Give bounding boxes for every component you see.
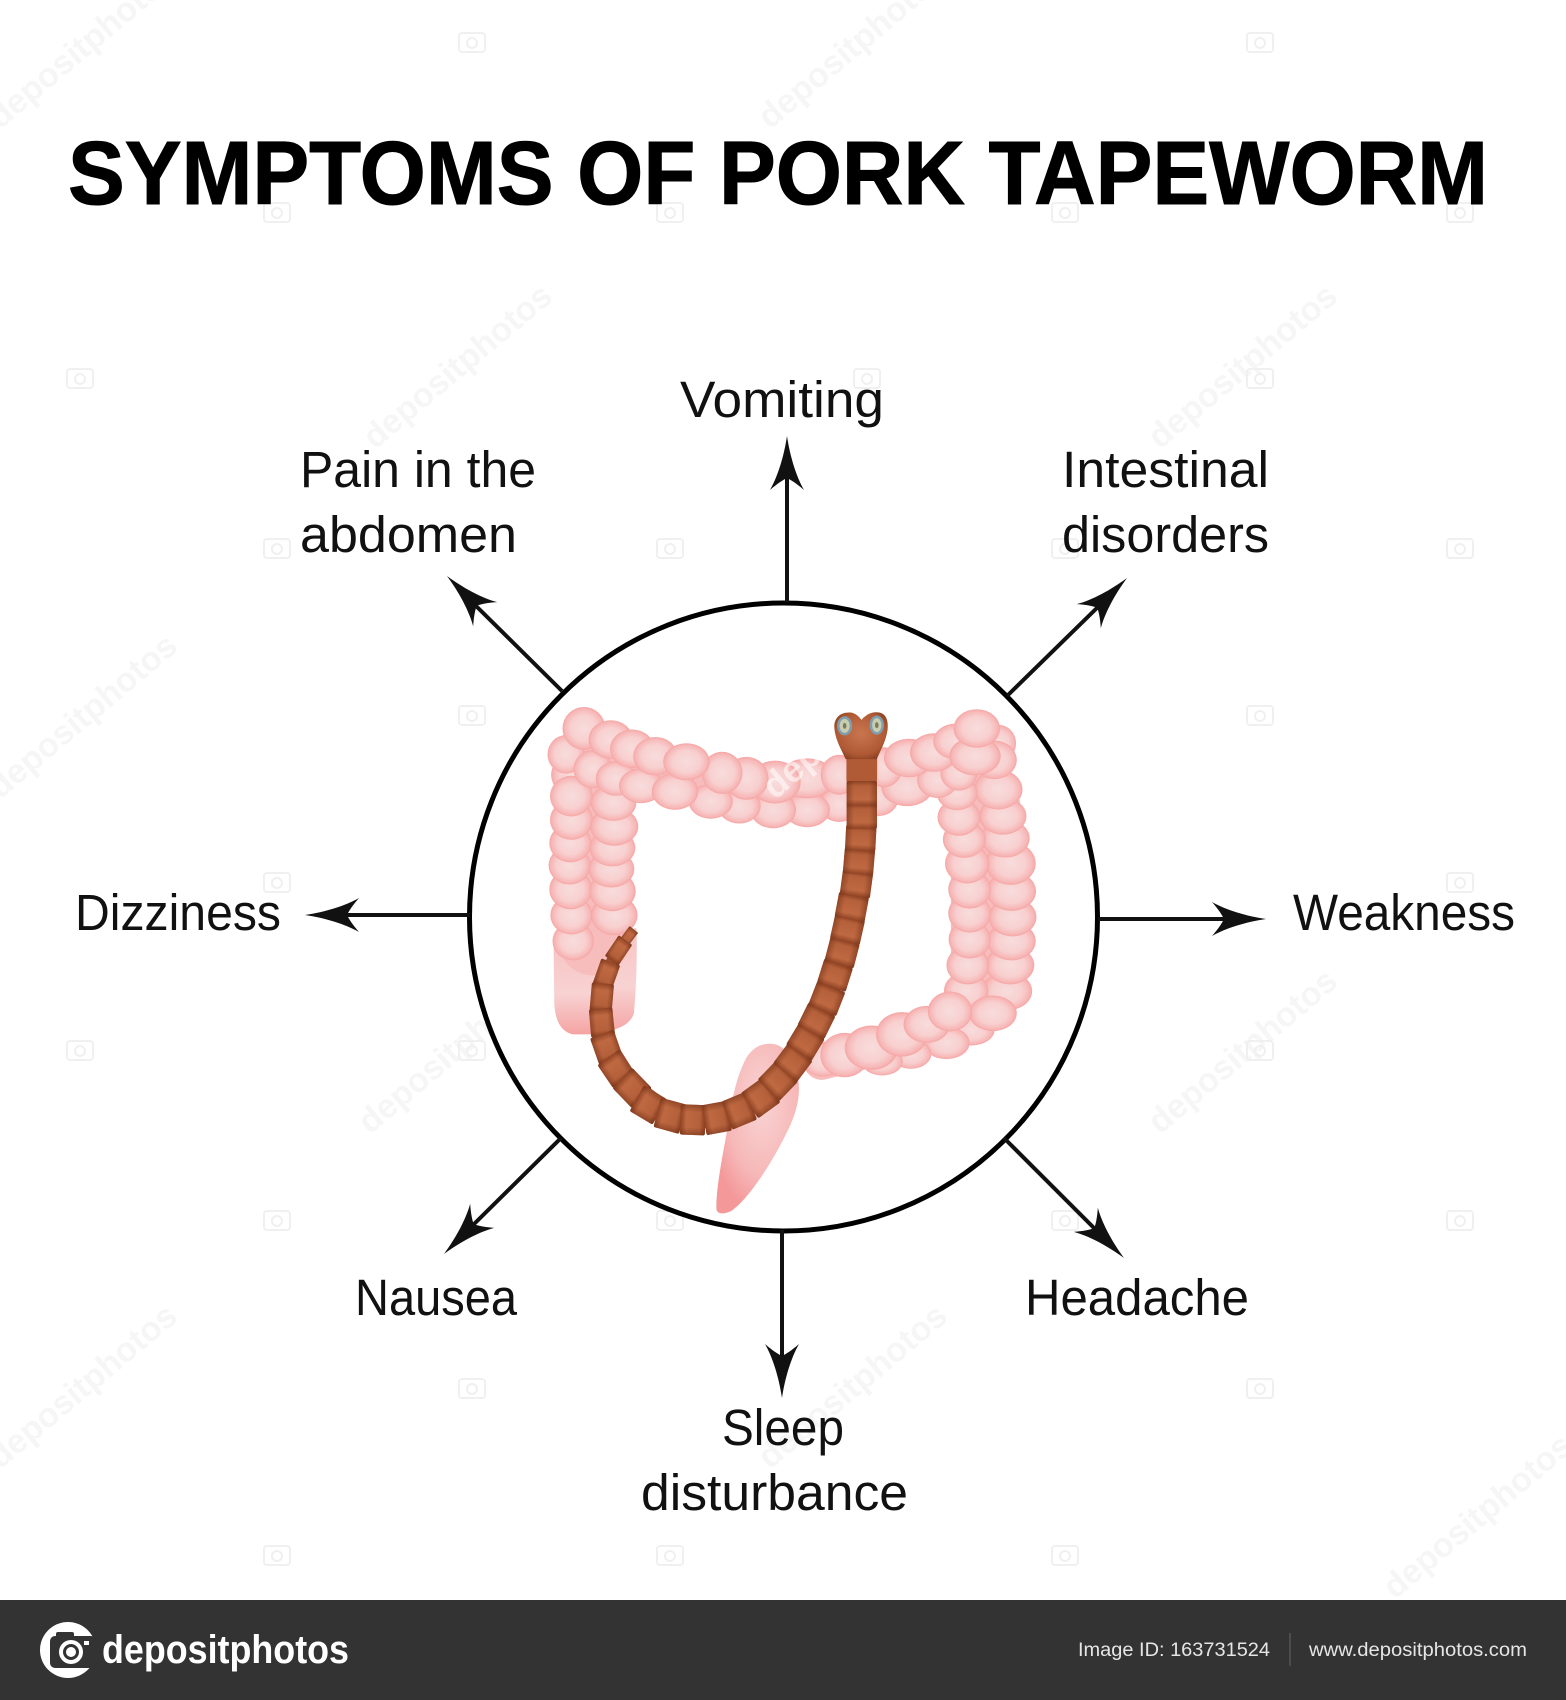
label: headache: Headache (1025, 1269, 1249, 1326)
title: SYMPTOMS OF PORK TAPEWORM (68, 124, 1488, 224)
worm segments (589, 781, 877, 1135)
arrow: sleep disturbance (765, 1230, 799, 1398)
watermark pattern: depositphotos (1141, 961, 1345, 1141)
illustration: intestine and tapeworm (547, 707, 1036, 1213)
watermark over intestine: depo (754, 718, 845, 807)
descending colon (937, 770, 1036, 1010)
label: pain in the abdomen: Pain in the (300, 441, 536, 498)
website url: www.depositphotos.com (1308, 1640, 1527, 1661)
sigmoid colon (801, 991, 1017, 1077)
arrow: weakness (1098, 902, 1266, 936)
tapeworm neck (846, 754, 877, 781)
label: pain in the abdomen: abdomen (300, 506, 517, 563)
arrow: nausea (432, 1138, 561, 1266)
logo wordmark: depositphotos (102, 1628, 349, 1672)
worm body backing (602, 771, 862, 1118)
watermark pattern: depositphotos (751, 1296, 955, 1476)
head suckers (837, 715, 884, 735)
central circle (470, 603, 1098, 1231)
label: dizziness: Dizziness (75, 884, 281, 941)
image id: Image ID: 163731524 (1078, 1640, 1270, 1661)
label: intestinal disorders: Intestinal (1062, 441, 1269, 498)
ascending colon (549, 754, 638, 960)
transverse colon (547, 707, 1017, 828)
watermark pattern: depositphotos (356, 276, 560, 456)
label: sleep disturbance: disturbance (641, 1464, 908, 1521)
label: vomiting: Vomiting (680, 371, 884, 428)
label: intestinal disorders: disorders (1062, 506, 1269, 563)
footer bar (0, 1600, 1566, 1700)
rectum (716, 1044, 799, 1213)
arrow: dizziness (305, 898, 470, 932)
label: nausea: Nausea (355, 1269, 518, 1326)
watermark pattern: depositphotos (351, 961, 555, 1141)
tapeworm (589, 712, 888, 1135)
arrow: vomiting (770, 436, 804, 602)
colon backing (582, 747, 986, 1061)
arrow: pain in the abdomen (435, 564, 562, 691)
arrow: headache (1004, 1138, 1136, 1270)
label: weakness: Weakness (1293, 884, 1515, 941)
cecum (554, 928, 637, 1034)
arrow: intestinal disorders (1007, 566, 1139, 696)
logo icon: camera (40, 1622, 96, 1678)
label: sleep disturbance: Sleep (722, 1399, 844, 1456)
tapeworm head (834, 712, 888, 759)
footer logo (40, 1622, 349, 1678)
watermark pattern: depositphotos (1141, 276, 1345, 456)
